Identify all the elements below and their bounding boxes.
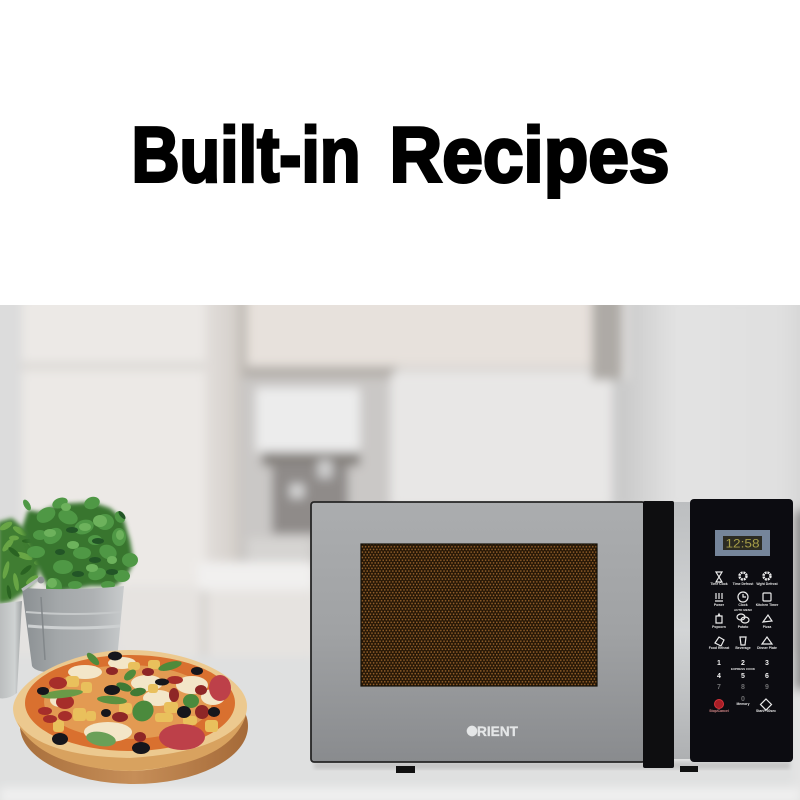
- preset buttons: Wght Defrost: [756, 582, 779, 586]
- stop button: [714, 700, 724, 708]
- digital display: [715, 530, 770, 556]
- number keys: 6: [765, 673, 769, 680]
- number keys: 3: [765, 660, 769, 667]
- sauce: [25, 655, 235, 751]
- preset buttons: EXPRESS COOK: [731, 667, 756, 671]
- button icons: [715, 572, 772, 646]
- left metal pot: [0, 601, 22, 698]
- black olives: [37, 652, 220, 754]
- cheese patches: [50, 657, 225, 742]
- preset buttons: Pizza: [763, 625, 771, 629]
- salami slices: [38, 667, 231, 750]
- title: Recipes: [390, 110, 670, 198]
- digital display: 12:58: [726, 536, 760, 550]
- oven feet: [396, 766, 698, 773]
- preset buttons: [709, 582, 779, 713]
- number keys: 7: [717, 684, 721, 691]
- number keys: 1: [717, 660, 721, 667]
- white header background: [0, 0, 800, 305]
- number keys: 5: [741, 673, 745, 680]
- preset buttons: Beverage: [735, 646, 751, 650]
- preset buttons: Stop/Cancel: [709, 709, 729, 713]
- left plant foliage: [0, 518, 46, 604]
- number keys: 4: [717, 673, 721, 680]
- wooden plate: [20, 668, 248, 784]
- ORIENT logo: RIENT: [477, 724, 519, 739]
- preset buttons: Clock: [738, 603, 748, 607]
- preset buttons: Potato: [738, 625, 748, 629]
- blurred kitchen background photo: [0, 295, 800, 800]
- window mesh: [361, 544, 597, 686]
- door handle: [643, 501, 674, 768]
- number keys: 2: [741, 660, 745, 667]
- silver strip: [674, 502, 690, 759]
- pizza: [13, 650, 248, 784]
- preset buttons: Time Cook: [710, 582, 728, 586]
- control panel: [690, 499, 793, 762]
- right plant foliage: [21, 495, 138, 596]
- basil leaves: [41, 651, 199, 748]
- number keys: 0: [741, 696, 745, 703]
- preset buttons: Food Reheat: [709, 646, 730, 650]
- preset buttons: Memory: [736, 702, 750, 706]
- number keys: [717, 660, 769, 703]
- preset buttons: Start/+30sec: [756, 709, 776, 713]
- cheese and corn chunks: [53, 660, 218, 732]
- shadow under oven: [314, 762, 790, 769]
- potted plants: [0, 495, 138, 698]
- toppings: [37, 651, 231, 754]
- preset buttons: Power: [714, 603, 725, 607]
- preset buttons: Time Defrost: [733, 582, 754, 586]
- number keys: 9: [765, 684, 769, 691]
- start button: [760, 699, 772, 710]
- number keys: 8: [741, 684, 745, 691]
- preset buttons: AUTO MENU: [734, 608, 752, 612]
- metal bucket: [22, 576, 124, 673]
- microwave oven: [311, 499, 793, 773]
- preset buttons: Kitchen Timer: [756, 603, 779, 607]
- title: Built-in: [132, 110, 360, 198]
- door: [311, 502, 645, 762]
- preset buttons: Dinner Plate: [757, 646, 777, 650]
- preset buttons: Popcorn: [712, 625, 726, 629]
- crust: [13, 650, 247, 771]
